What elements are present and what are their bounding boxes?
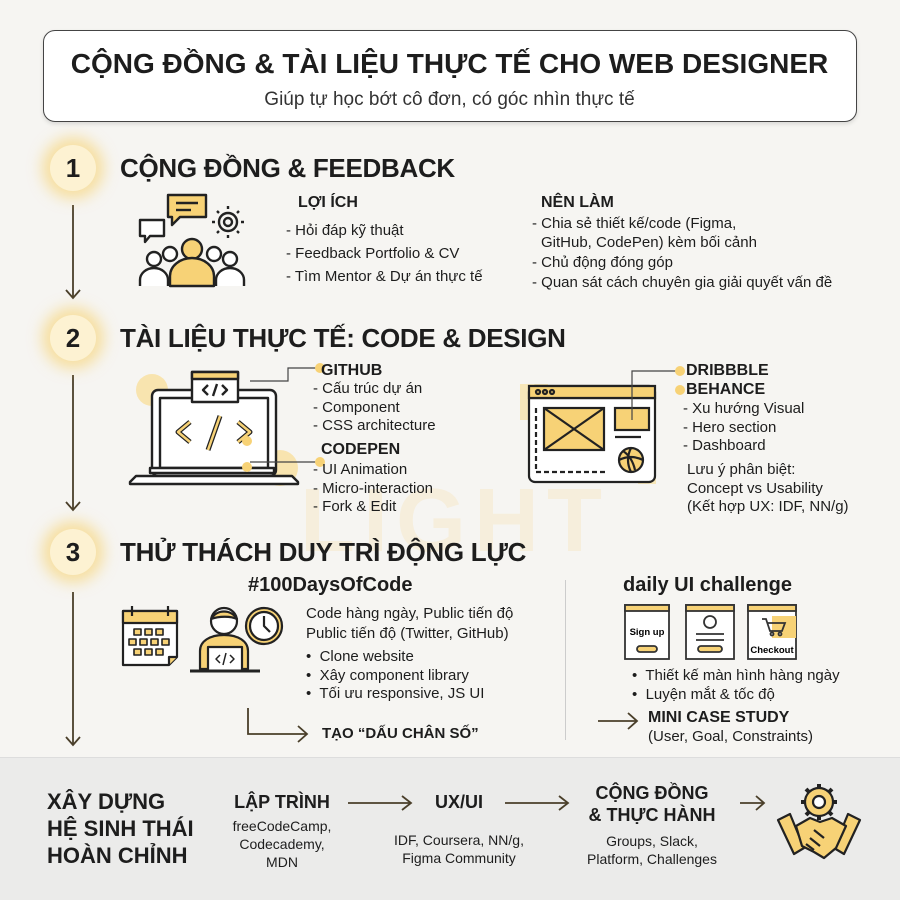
block: daily UI bullets [632,667,840,703]
block: nen lam: NÊN LÀM [541,194,614,211]
step: ux/ui: Figma Community [402,850,516,866]
step: cong dong: Groups, Slack, [606,833,698,849]
bottom title: XÂY DỰNG [47,789,165,814]
step: cong dong: CỘNG ĐỒNG [595,783,708,803]
block: 100days text: • Clone website [306,648,414,665]
block: nen lam [532,192,832,291]
block: github codepen: GITHUB [321,362,382,379]
block: mini case study [648,709,813,745]
step: ux/ui [394,792,524,866]
step: cong dong [587,782,717,867]
arrow 1 [348,795,412,811]
connectors github/codepen [250,363,325,467]
block: dribbble behance: - Hero section [683,419,776,436]
section 1 [34,128,455,208]
step: lap trinh: MDN [266,854,298,870]
bottom band [0,757,900,900]
watermark: LIGHT [300,471,610,571]
step: ux/ui: UX/UI [435,792,483,812]
step: lap trinh: freeCodeCamp, [233,818,331,834]
section 3 heading [34,512,526,592]
number 1: 1 [66,153,80,183]
label: tao dau chan so: TẠO “DẤU CHÂN SỐ” [322,725,479,742]
block: github codepen: - Cấu trúc dự án [313,380,422,397]
number 2 [50,315,96,361]
bottom title [47,789,194,868]
section 2 heading [34,298,566,378]
block: dribbble behance: BEHANCE [686,381,765,398]
block: mini case study: (User, Goal, Constraints) [648,728,813,745]
block: github codepen [313,362,436,515]
icon: ui cards: Sign up [630,627,665,638]
icon: laptop [128,370,300,486]
divider [565,580,566,740]
heading 1: CỘNG ĐỒNG & FEEDBACK [120,153,455,183]
block: dribbble behance: (Kết hợp UX: IDF, NN/g) [687,498,849,515]
heading: daily UI: daily UI challenge [623,574,792,596]
icon: calendar person clock [122,606,284,672]
arrow: to dau chan so [247,708,308,743]
icon: ui cards [624,604,797,660]
block: github codepen: - Component [313,399,400,416]
block: loi ich: - Feedback Portfolio & CV [286,245,459,262]
block: 100days text [306,605,513,702]
icon: community [138,194,246,288]
block: 100days text: Code hàng ngày, Public tiến độ [306,605,513,622]
block: dribbble behance: DRIBBBLE [686,362,769,379]
block: loi ich: LỢI ÍCH [298,194,358,211]
block: 100days text: • Xây component library [306,667,469,684]
block: github codepen: CODEPEN [321,441,400,458]
block: nen lam: - Quan sát cách chuyên gia giải quyết vấn đề [532,274,832,291]
block: 100days text: • Tối ưu responsive, JS UI [306,685,484,702]
block: dribbble behance: - Dashboard [683,437,766,454]
block: 100days text: Public tiến độ (Twitter, GitHub) [306,625,509,642]
number 3 [50,529,96,575]
icon: handshake gear [776,784,862,860]
step: cong dong: & THỰC HÀNH [589,805,715,825]
heading: 100DaysOfCode: #100DaysOfCode [248,574,413,596]
block: github codepen: - UI Animation [313,461,407,478]
bottom title: HOÀN CHỈNH [47,843,188,868]
block: nen lam: - Chia sẻ thiết kế/code (Figma, [532,215,736,232]
title: CỘNG ĐỒNG & TÀI LIỆU THỰC TẾ CHO WEB DESIGNER [71,48,828,79]
block: dribbble behance: Concept vs Usability [687,480,823,497]
title box [43,30,857,122]
number 3: 3 [66,537,80,567]
arrow 2 [505,795,570,811]
step: ux/ui: IDF, Coursera, NN/g, [394,832,524,848]
arrow 3 [740,795,766,811]
icon: browser wireframe [520,366,685,484]
heading 3: THỬ THÁCH DUY TRÌ ĐỘNG LỰC [120,537,526,567]
arrow: to mini case study [598,712,638,730]
block: daily UI bullets: • Luyện mắt & tốc độ [632,686,775,703]
block: dribbble behance: Lưu ý phân biệt: [687,461,795,478]
step: lap trinh [232,791,331,870]
number 2: 2 [66,323,80,353]
block: nen lam: GitHub, CodePen) kèm bối cảnh [541,234,757,251]
block: dribbble behance: - Xu hướng Visual [683,400,804,417]
subtitle: Giúp tự học bớt cô đơn, có góc nhìn thực tế [264,89,635,110]
block: loi ich: - Hỏi đáp kỹ thuật [286,222,404,239]
step: cong dong: Platform, Challenges [587,851,717,867]
block: daily UI bullets: • Thiết kế màn hình hàng ngày [632,667,840,684]
block: loi ich: - Tìm Mentor & Dự án thực tế [286,268,483,285]
block: github codepen: - Fork & Edit [313,498,396,515]
block: loi ich [286,193,483,285]
block: nen lam: - Chủ động đóng góp [532,254,673,271]
step: lap trinh: Codecademy, [239,836,325,852]
bottom title: HỆ SINH THÁI [47,816,194,841]
block: github codepen: - CSS architecture [313,417,436,434]
icon: ui cards: Checkout [750,645,794,656]
block: mini case study: MINI CASE STUDY [648,709,789,726]
block: github codepen: - Micro-interaction [313,480,433,497]
step: lap trinh: LẬP TRÌNH [234,792,330,812]
block: dribbble behance [683,362,849,515]
heading 2: TÀI LIỆU THỰC TẾ: CODE & DESIGN [120,323,566,353]
number 1 [50,145,96,191]
